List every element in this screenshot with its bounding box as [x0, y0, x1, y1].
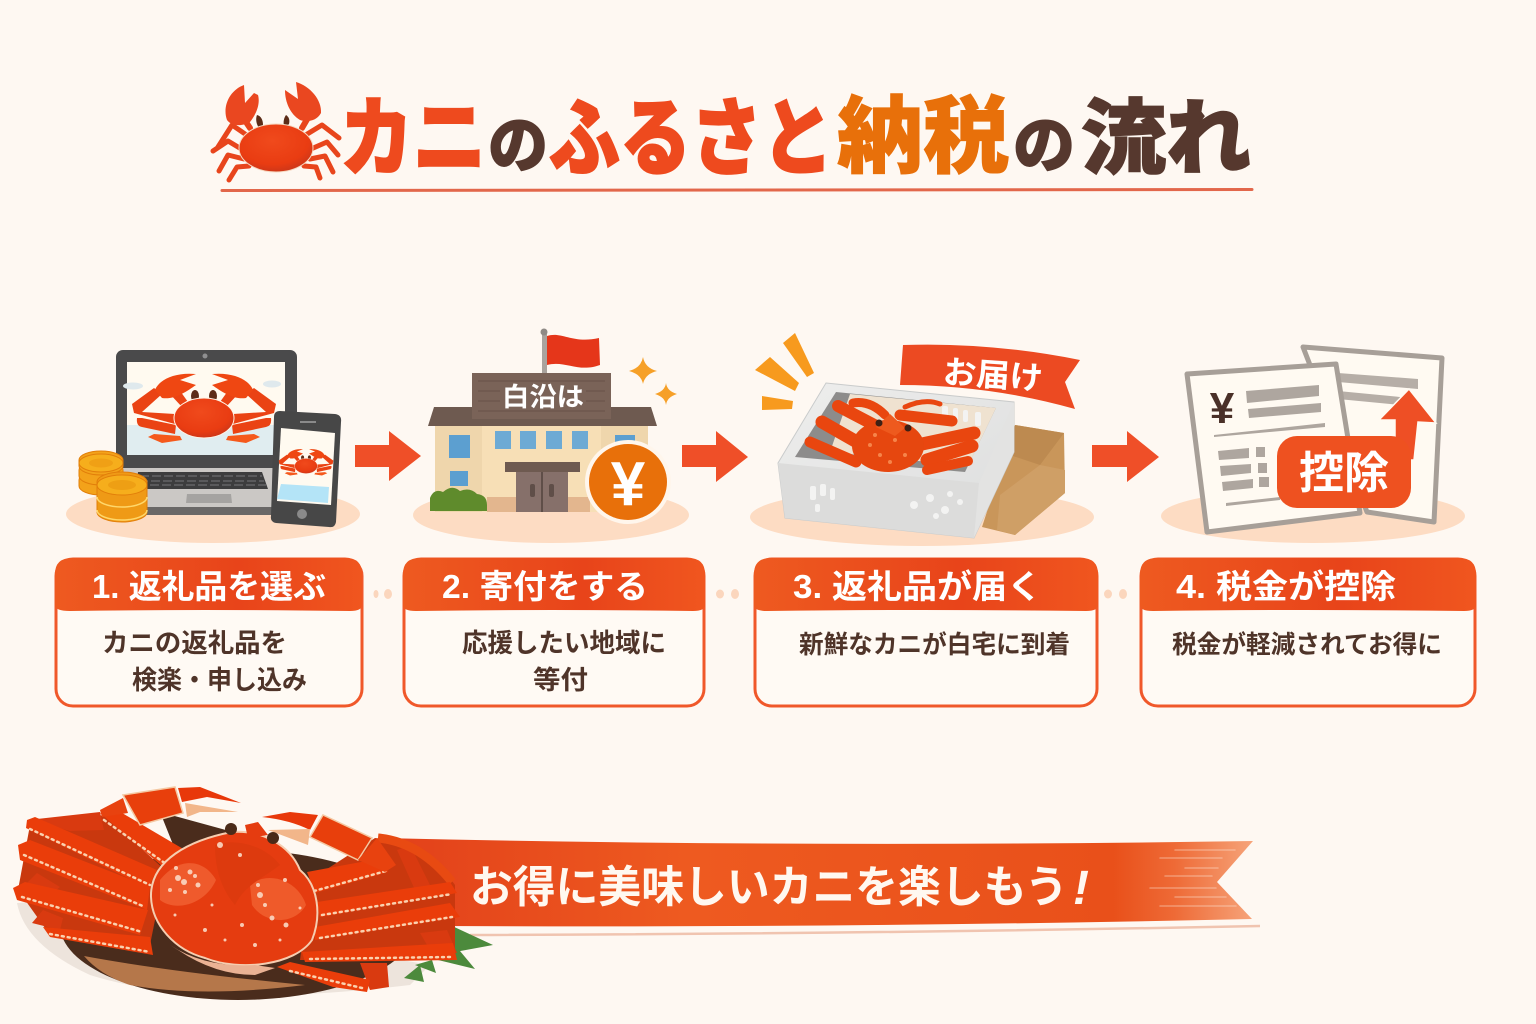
card 1 body: カニの返礼品を [102, 628, 287, 658]
card 2 header [403, 558, 705, 611]
foam box [778, 383, 1014, 538]
arrow 3 [1092, 431, 1159, 482]
back document [1303, 347, 1442, 522]
title text: カニ: カニ [340, 68, 486, 193]
illustration 3: delivery box [750, 333, 1094, 546]
card 4 header [1140, 558, 1476, 611]
crab in box [810, 402, 974, 472]
title text: ふるさと: ふるさと [549, 72, 833, 193]
connector dots 3 [1104, 589, 1127, 599]
step card 2 [403, 558, 705, 706]
yen coin [585, 440, 671, 524]
card 2 body [462, 628, 666, 695]
card 1 body [102, 628, 307, 695]
platform ellipse [750, 488, 1094, 546]
ribbon [900, 345, 1080, 409]
building sign text: 白沿は [502, 382, 584, 412]
rear leg segments [25, 812, 457, 990]
platform ellipse [413, 487, 689, 543]
icon: coin stacks [79, 451, 147, 522]
leaves [404, 925, 493, 982]
leg highlights [22, 820, 452, 988]
card 2 body: 応援したい地域に [462, 628, 666, 658]
crab on plate [13, 787, 493, 1000]
card 1 heading: 1. 返礼品を選ぶ [92, 568, 326, 605]
title text: 流れ: 流れ [1081, 72, 1251, 191]
card 3 heading: 3. 返礼品が届く [793, 568, 1042, 605]
arrow 2 [682, 431, 748, 482]
building [428, 373, 657, 512]
title [213, 68, 1251, 193]
deduction badge: 控除 [1299, 449, 1389, 498]
deduction badge [1277, 436, 1411, 508]
legs [13, 810, 460, 992]
illustration 2: municipal building [413, 328, 689, 543]
banner ribbon [380, 838, 1253, 926]
icon: burst rays [755, 333, 814, 410]
title text: の: の [488, 95, 548, 185]
cardboard box [982, 425, 1065, 535]
card 2 heading: 2. 寄付をする [442, 568, 648, 605]
card 2 body: 等付 [533, 665, 588, 695]
step card 4 [1140, 558, 1476, 706]
step card 3 [754, 558, 1098, 706]
flag [540, 328, 600, 374]
illustration 4: tax documents [1161, 347, 1465, 543]
card 1 body: 検楽・申し込み [132, 665, 307, 695]
arrow 1 [355, 431, 421, 481]
yen coin: ¥ [611, 450, 646, 519]
icon: sparkles [629, 357, 677, 405]
claws [100, 787, 396, 872]
connector dots 2 [716, 589, 739, 599]
plate [17, 850, 430, 1000]
card 1 header [55, 558, 362, 611]
platform ellipse [66, 485, 360, 543]
platform ellipse [1161, 489, 1465, 543]
title text: 納税: 納税 [837, 70, 1009, 191]
card 3 body: 新鮮なカニが白宅に到着 [799, 630, 1070, 659]
banner text: お得に美味しいカニを楽しもう [470, 863, 1068, 912]
card 4 heading: 4. 税金が控除 [1176, 568, 1396, 605]
front document [1187, 364, 1360, 532]
card 3 header [754, 558, 1098, 611]
banner underline [470, 926, 1260, 935]
ribbon text: お届け [942, 354, 1044, 397]
connector dots 1 [374, 589, 392, 599]
carapace [151, 822, 317, 975]
phone [271, 411, 341, 527]
illustration 1: laptop and phone [66, 350, 360, 543]
yen mark: ¥ [1210, 384, 1235, 433]
step card 1 [55, 558, 362, 706]
title underline [222, 190, 1252, 191]
title text: の: の [1013, 95, 1075, 185]
eyes [225, 823, 279, 844]
card 4 body: 税金が軽減されてお得に [1172, 630, 1442, 659]
under-leg fill [18, 812, 455, 960]
banner text: ! [1073, 862, 1089, 915]
laptop [116, 350, 297, 515]
icon: up arrow [1379, 389, 1436, 460]
icon: title crab [213, 82, 339, 180]
